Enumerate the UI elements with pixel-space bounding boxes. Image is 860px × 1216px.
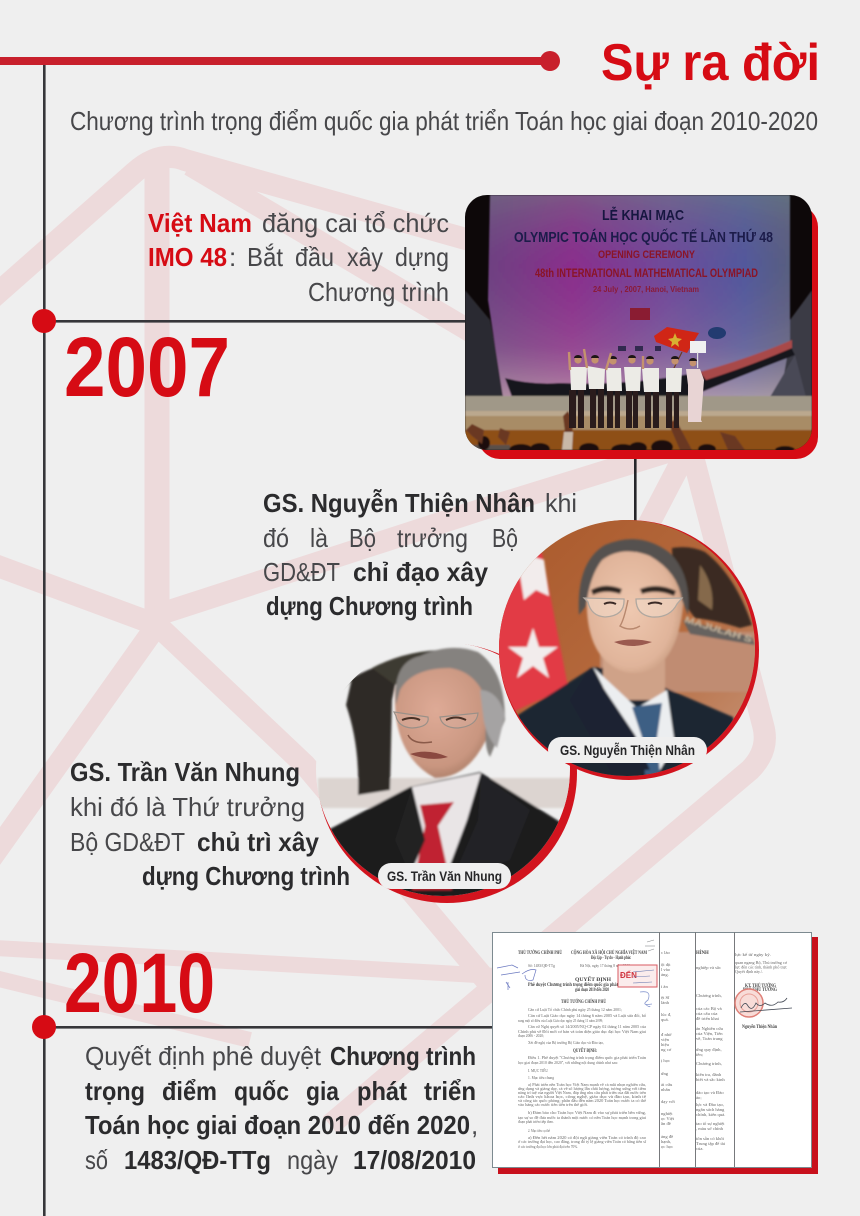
text block: decision 2010: Quyết định phê duyệt: [85, 1041, 322, 1071]
document page 1 text: QUYẾT ĐỊNH: [575, 977, 611, 983]
document: middle column fragments: đề triển khai: [696, 1016, 720, 1021]
document: middle column fragments: tao tổ sự nghiệt: [696, 1121, 725, 1126]
document: middle column fragments: nghiệt: [661, 1111, 673, 1116]
timeline marker 2007: [32, 309, 469, 333]
document page 1 text: học giai đoạn 2010 đến 2020", với những nội dung chính như sau:: [518, 1060, 618, 1066]
text block: decision 2010: trọng: [85, 1076, 145, 1106]
text block: GS. Trần Văn Nhung: [70, 757, 350, 891]
document page 1 text: THỦ TƯỚNG CHÍNH PHỦ: [518, 950, 562, 956]
document: handwritten note: [497, 965, 536, 990]
text block: Việt Nam host IMO 48: Việt Nam: [148, 208, 252, 238]
document page 1 text: sung một số điều của Luật Giáo dục ngày 25 tháng 11 năm 2009;: [518, 1018, 603, 1023]
document: middle column fragments: dạy với: [661, 1099, 676, 1104]
document page 1 text: Xét đề nghị của Bộ trưởng Bộ Giáo dục và Đào tạo,: [528, 1040, 604, 1046]
document: middle column fragments: ần đề: [660, 1121, 671, 1126]
document: middle column fragments: chính, kiến quả.: [696, 1112, 725, 1118]
document page 1 text: 1. Mục tiêu chung: [528, 1075, 555, 1080]
text block: decision 2010: ,: [471, 1110, 478, 1140]
document page 1 text: Hà Nội, ngày 17 tháng 8 năm 2010: [580, 963, 631, 969]
text block: decision 2010: điểm: [162, 1076, 217, 1106]
document: middle column fragments: ứng: [661, 1071, 669, 1076]
text block: GS. Nguyễn Thiện Nhân: GD&ĐT: [263, 557, 340, 587]
document page 1 text: các lĩnh vực khoa học, công nghệ, giáo dục và đào tạo, kinh tế: [518, 1094, 647, 1100]
name tag: Trần Văn Nhung: GS. Trần Văn Nhung: [387, 868, 502, 884]
backdrop lettering: 24 July , 2007, Hanoi, Vietnam: [593, 285, 699, 294]
document: middle column fragments: ải cứu: [661, 1082, 673, 1087]
document: middle column fragments: dào tạo và Đào: [696, 1090, 724, 1095]
document: middle column fragments: HÌNH: [696, 950, 709, 956]
document: stamp: [618, 965, 657, 1007]
portrait: GS. Nguyễn Thiện Nhân: MAJULAH S: [683, 614, 753, 644]
document: middle column fragments: iên;: [696, 1052, 703, 1057]
document: middle column fragments: của.: [696, 1146, 704, 1151]
document: middle column fragments: hiệu: [661, 1042, 670, 1047]
text block: GS. Nguyễn Thiện Nhân: GS. Nguyễn Thiện Nhân: [263, 488, 535, 518]
text block: GS. Nguyễn Thiện Nhân: trưởng: [397, 523, 468, 553]
document: middle column fragments: ảng đề: [661, 1134, 673, 1139]
timeline: vertical axis: [43, 65, 46, 1216]
document: middle column fragments: l vào: [661, 967, 671, 972]
photo: IMO 48 opening ceremony: [465, 195, 818, 459]
document: middle column fragments: của Viện, Tiến: [696, 1031, 723, 1037]
document page 1 text: năng trí tuệ của người Việt Nam, đáp ứng nhu cầu phát triển của đất nước trên: [518, 1090, 647, 1096]
backdrop lettering: LỄ KHAI MẠC: [602, 207, 684, 224]
document: signature block: lực đến các tỉnh, thành phố trực: [735, 964, 787, 970]
text block: Việt Nam host IMO 48: đầu: [295, 242, 334, 272]
document: middle column fragments: ỉ ăn: [661, 984, 668, 989]
text block: GS. Nguyễn Thiện Nhân: Bộ: [492, 523, 518, 553]
document page 1 text: Số: 1483/QĐ-TTg: [528, 963, 556, 968]
flag and team: [569, 327, 706, 428]
document page 1 text: a) Đến hết năm 2020 có đội ngũ giảng viên Toán có trình độ cao: [528, 1135, 647, 1140]
audience heads: [477, 435, 796, 450]
title: Sự ra đời: [601, 34, 820, 92]
text block: GS. Nguyễn Thiện Nhân: [263, 488, 577, 621]
name tag: Nguyễn Thiện Nhân: GS. Nguyễn Thiện Nhân: [560, 742, 695, 758]
document: middle column fragments: ng cơ: [661, 1047, 672, 1052]
text block: GS. Nguyễn Thiện Nhân: Bộ: [349, 523, 376, 553]
text block: GS. Trần Văn Nhung: khi đó là Thứ trưởng: [70, 792, 305, 822]
document: middle column fragments: viện: [661, 1037, 670, 1042]
document page 1 text: QUYẾT ĐỊNH:: [573, 1048, 597, 1054]
document: middle column fragments: ứng quy định,: [696, 1047, 722, 1053]
document: middle column fragments: ệt Sĩ: [661, 995, 670, 1000]
document page 1 text: a) Phát triển nền Toán học Việt Nam mạnh về cả mũi nhọn nghiên cứu,: [528, 1082, 646, 1088]
connector from photo to portrait: [634, 456, 637, 522]
document page 1 text: ứng dụng và giảng dạy, cả về số lượng lẫn chất lượng, tương xứng với tiềm: [518, 1086, 646, 1092]
head: [393, 666, 487, 780]
document page 1 text: Độc lập - Tự do - Hạnh phúc: [591, 956, 632, 961]
year 2007: 2007: [64, 320, 230, 414]
document: middle column fragments: [660, 950, 726, 1151]
text block: Việt Nam host IMO 48: đăng cai tổ chức: [262, 208, 449, 238]
text block: GS. Nguyễn Thiện Nhân: khi: [545, 488, 577, 518]
document: middle column fragments: đ nhờ: [661, 1032, 672, 1037]
document: middle column fragments: ọc học: [661, 1144, 673, 1149]
document: middle column fragments: hạnh,: [661, 1139, 671, 1145]
document: stamp: ĐẾN: [620, 970, 637, 980]
text block: GS. Trần Văn Nhung: GS. Trần Văn Nhung: [70, 757, 300, 787]
text block: Việt Nam host IMO 48: :: [229, 242, 236, 272]
document: middle column fragments: nhân: [661, 1087, 671, 1092]
text block: GS. Trần Văn Nhung: dựng Chương trình: [142, 861, 350, 891]
document: middle column fragments: kiến tra, đánh: [696, 1072, 722, 1078]
name tag: Trần Văn Nhung: [378, 863, 511, 889]
suit: [518, 666, 734, 776]
document: middle column fragments: Trung tập để tài: [696, 1141, 726, 1146]
document page 1 text: đoạn phát triển tiếp theo.: [518, 1119, 554, 1124]
document: middle column fragments: của các Bộ và: [696, 1006, 722, 1011]
document: middle column fragments: nghiệp và sắc: [696, 965, 721, 970]
document page 1 text: ở các trường đại học, cao đẳng, trong đó tỷ lệ giảng viên Toán có bằng tiến sĩ: [518, 1139, 647, 1145]
document: signature block: PHÓ THỦ TƯỚNG: [743, 987, 777, 993]
document: signature block: KT. THỦ TƯỚNG: [745, 983, 776, 989]
text block: GS. Nguyễn Thiện Nhân: chỉ đạo xây: [353, 557, 489, 587]
text block: Việt Nam host IMO 48: dựng: [395, 242, 449, 272]
text block: decision 2010: 1483/QĐ-TTg: [124, 1145, 271, 1175]
document: middle column fragments: ị học: [661, 1058, 670, 1063]
document: middle column fragments: quá.: [661, 1017, 669, 1022]
document: middle column fragments: Chương trình,: [696, 1061, 722, 1067]
document page 1 text: giai đoạn 2010 đến 2020: [575, 988, 609, 993]
document page 1 text: Phê duyệt Chương trình trọng điểm quốc gia phát triển Toán học: [528, 982, 646, 988]
document page 1 text: I. MỤC TIÊU: [528, 1068, 549, 1073]
text block: decision 2010: ngày: [287, 1145, 338, 1175]
text block: decision 2010: gia: [306, 1076, 339, 1106]
text block: Việt Nam host IMO 48: IMO 48: [148, 242, 227, 272]
document: middle column fragments: của cấu của: [696, 1011, 717, 1016]
timeline marker 2010: [32, 1015, 494, 1039]
text block: decision 2010: triển: [424, 1076, 476, 1106]
document: middle column fragments: về, Toán trung: [696, 1036, 723, 1042]
backdrop lettering: OLYMPIC TOÁN HỌC QUỐC TẾ LẦN THỨ 48: [514, 228, 773, 246]
document: middle column fragments: án Nghiên cứu: [696, 1026, 724, 1031]
text block: decision 2010: Chương trình: [330, 1041, 476, 1071]
text block: GS. Trần Văn Nhung: chủ trì xây: [197, 827, 319, 857]
document: middle column fragments: ngân sách hàng: [696, 1107, 725, 1112]
document page 1 text: 2. Mục tiêu cụ thể: [528, 1128, 551, 1133]
text block: Việt Nam host IMO 48: Bắt: [247, 242, 284, 272]
document: middle column fragments: lành: [661, 1000, 670, 1005]
document: middle column fragments: lúc đ,: [661, 1012, 671, 1018]
document: middle column fragments: ội dịt: [661, 962, 671, 967]
suit: [330, 770, 560, 896]
document page 1 text: Chính phủ về Đổi mới cơ bản và toàn diện giáo dục đại học Việt Nam giai: [518, 1029, 647, 1034]
text block: decision 2010: [85, 1041, 478, 1175]
document page 1 text: CỘNG HÒA XÃ HỘI CHỦ NGHĨA VIỆT NAM: [571, 950, 647, 956]
document page 1 text: THỦ TƯỚNG CHÍNH PHỦ: [561, 999, 606, 1005]
document: signature block: lực kể từ ngày ký.: [735, 952, 771, 957]
document: signature block: Quyết định này./.: [735, 969, 763, 974]
backdrop lettering: OPENING CEREMONY: [598, 249, 696, 261]
document: signature block: Nguyễn Thiện Nhân: [742, 1024, 777, 1030]
text block: Việt Nam host IMO 48: xây: [347, 242, 383, 272]
text block: Việt Nam host IMO 48: Chương trình: [308, 277, 449, 307]
text block: Việt Nam host IMO 48: [148, 208, 449, 307]
text block: decision 2010: phát: [357, 1076, 407, 1106]
text block: decision 2010: Toán học giai đoạn 2010 đến 2020: [85, 1110, 470, 1140]
document page 1 text: b) Đảm bảo cho Toán học Việt Nam đi vào sự phát triển bền vững,: [528, 1110, 646, 1116]
document: signature block: [735, 952, 792, 1030]
document page 1 text: [518, 950, 647, 1149]
text block: GS. Nguyễn Thiện Nhân: đó: [263, 523, 289, 553]
document: middle column fragments: biết và sắc kinh: [696, 1077, 725, 1082]
backdrop lettering: 48th INTERNATIONAL MATHEMATICAL OLYMPIAD: [535, 266, 758, 280]
document: middle column fragments: lực và Đào tạo,: [696, 1102, 724, 1108]
backdrop lettering: [514, 207, 773, 351]
document page 1 text: Căn cứ Luật Giáo dục ngày 14 tháng 6 năm 2005 và Luật sửa đổi, bổ: [528, 1013, 647, 1019]
document: signature block: quan ngang Bộ, Thủ trưởng cơ: [735, 960, 788, 966]
document: decision 1483 scan: [492, 932, 818, 1174]
name tag: Nguyễn Thiện Nhân: [548, 737, 707, 763]
timeline: top red bar with dot: [0, 51, 560, 71]
text block: decision 2010: số: [85, 1145, 108, 1175]
portrait: GS. Trần Văn Nhung: [310, 640, 580, 910]
document: middle column fragments: ảo;: [696, 1095, 702, 1100]
portrait: GS. Nguyễn Thiện Nhân: [495, 515, 765, 790]
year 2010: 2010: [64, 936, 215, 1030]
document page 1 text: đoạn 2006 - 2020;: [518, 1033, 544, 1038]
document page 1 text: và công tác quốc phòng; phấn đấu đến năm 2020 Toán học nước ta có thể: [518, 1098, 647, 1103]
text block: GS. Trần Văn Nhung: Bộ GD&ĐT: [70, 827, 185, 857]
text block: decision 2010: quốc: [234, 1076, 289, 1106]
document: middle column fragments: ảng.: [661, 972, 669, 977]
head: [587, 545, 684, 673]
document page 1 text: vào hàng các nước tiên tiến trên thế giới.: [518, 1102, 588, 1107]
document page 1 text: Căn cứ Luật Tổ chức Chính phủ ngày 25 tháng 12 năm 2001;: [528, 1007, 622, 1012]
document page 1 text: ở các trường đại học lớn phải đạt trên 70%.: [518, 1144, 578, 1149]
document: middle column fragments: , màu sở chính: [696, 1126, 724, 1132]
document: middle column fragments: Chương trình,: [696, 993, 722, 999]
text block: decision 2010: 17/08/2010: [353, 1145, 476, 1175]
text block: GS. Nguyễn Thiện Nhân: dựng Chương trình: [266, 591, 473, 621]
document page 1 text: tạo sự so đề đưa nước ta thành một nước có nền Toán học mạnh trong giai: [518, 1115, 647, 1120]
document: middle column fragments: ọc Việt: [661, 1116, 675, 1121]
document: middle column fragments: tốn sẵn có khối: [696, 1136, 725, 1141]
document page 1 text: Căn cứ Nghị quyết số 14/2005/NQ-CP ngày 02 tháng 11 năm 2005 của: [528, 1024, 646, 1029]
document: middle column fragments: c lào: [661, 950, 671, 955]
document page 1 text: Điều 1. Phê duyệt "Chương trình trọng điểm quốc gia phát triển Toán: [528, 1055, 647, 1060]
text block: GS. Nguyễn Thiện Nhân: là: [310, 523, 328, 553]
document: date note: [645, 940, 655, 951]
